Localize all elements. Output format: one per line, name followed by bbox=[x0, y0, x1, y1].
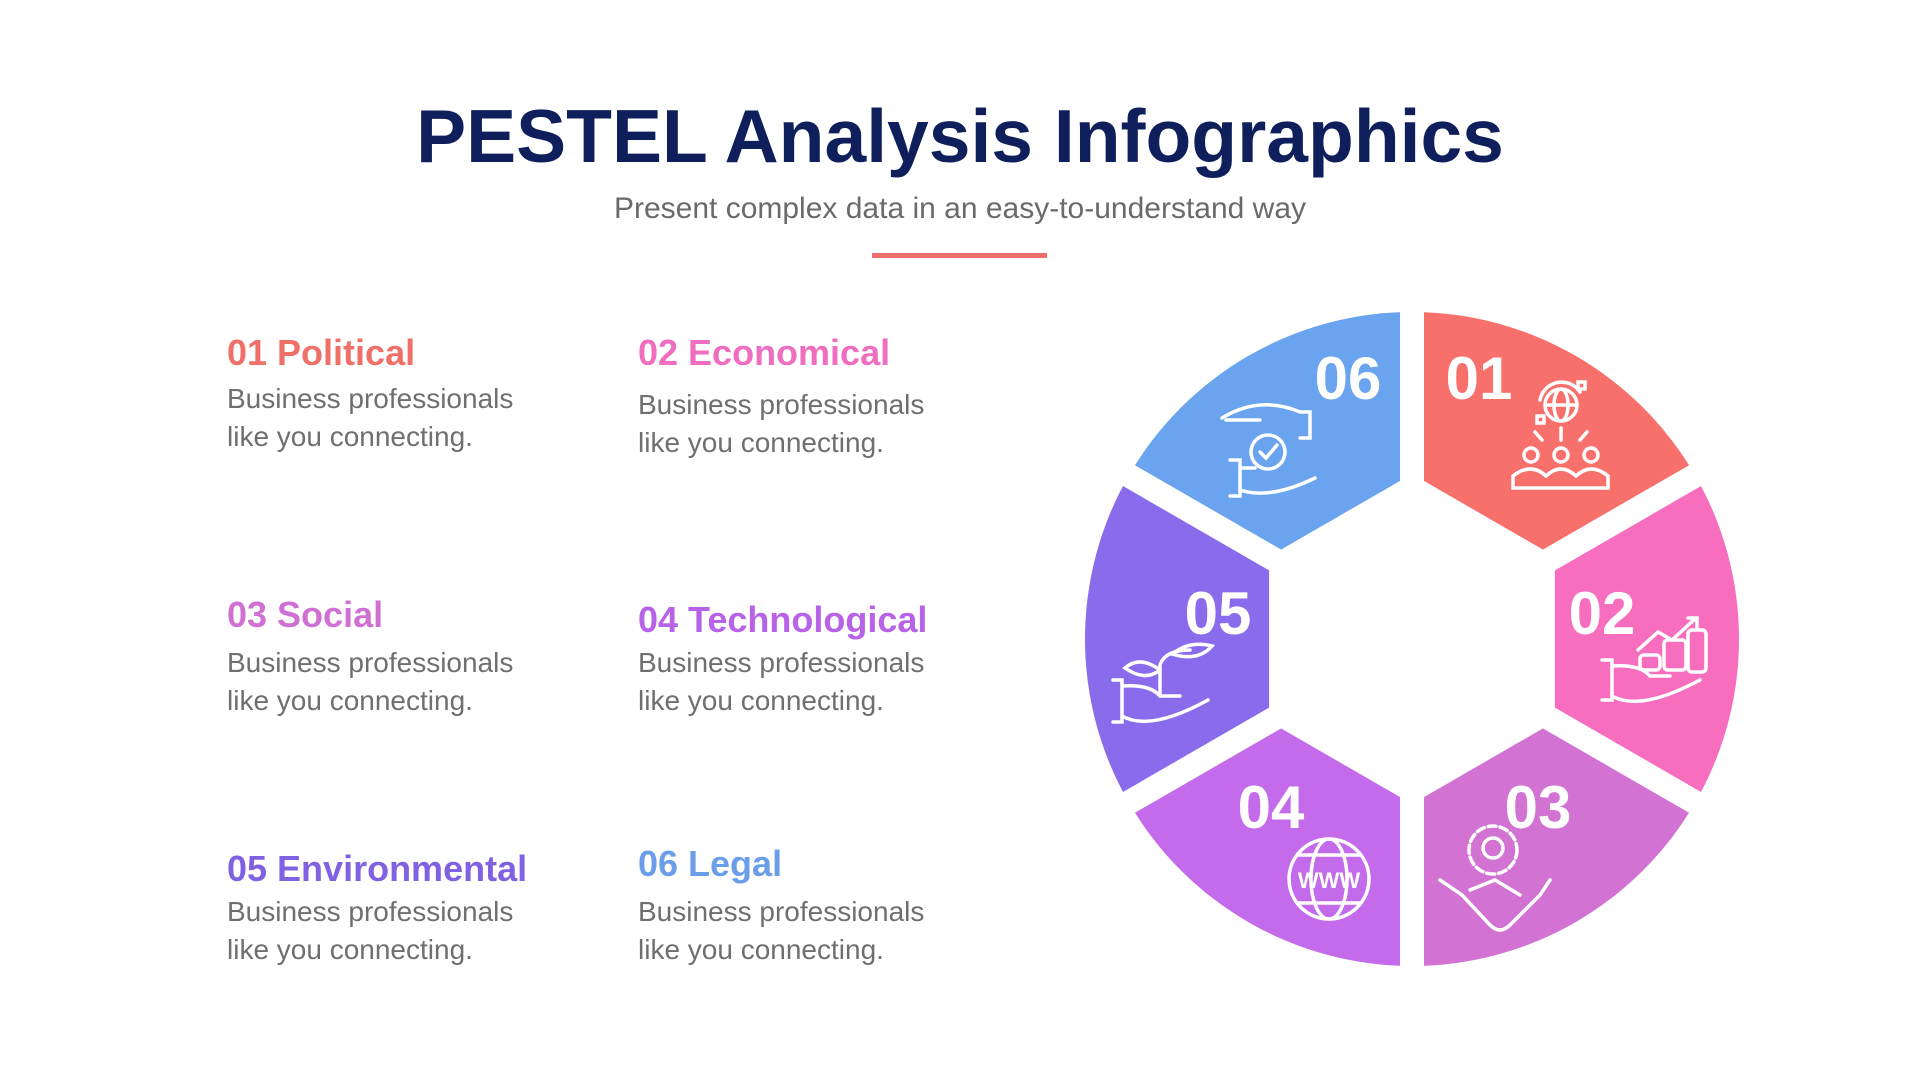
subtitle: Present complex data in an easy-to-understand way bbox=[614, 192, 1306, 225]
numbers: 06 bbox=[1315, 345, 1381, 412]
numbers: 04 bbox=[1238, 774, 1305, 841]
text block: 02 Economical bbox=[638, 332, 924, 458]
text block: 03 Social: 03 Social bbox=[227, 594, 383, 635]
icon: gear with handshake bbox=[1440, 826, 1550, 930]
text block: 03 Social: like you connecting. bbox=[227, 685, 473, 716]
numbers: 05 bbox=[1185, 580, 1251, 647]
segment 01 bbox=[1412, 312, 1695, 639]
text block: 04 Technological: like you connecting. bbox=[638, 685, 884, 716]
icon: www globe bbox=[1289, 839, 1369, 919]
text block: 06 Legal: 06 Legal bbox=[638, 843, 782, 884]
text block: 05 Environmental: like you connecting. bbox=[227, 934, 473, 965]
text block: 03 Social bbox=[227, 594, 513, 716]
text block: 04 Technological: 04 Technological bbox=[638, 599, 927, 640]
icon: www globe: WWW bbox=[1298, 868, 1360, 893]
text block: 01 Political: 01 Political bbox=[227, 332, 415, 373]
text block: 05 Environmental: Business professionals bbox=[227, 896, 513, 927]
numbers: 01 bbox=[1446, 345, 1512, 412]
accent line bbox=[872, 253, 1047, 258]
text block: 05 Environmental bbox=[227, 848, 527, 965]
text block: 04 Technological bbox=[638, 599, 927, 716]
icon: hand with coins bbox=[1602, 618, 1706, 701]
numbers: 03 bbox=[1505, 774, 1571, 841]
text block: 05 Environmental: 05 Environmental bbox=[227, 848, 527, 889]
text block: 01 Political bbox=[227, 332, 513, 452]
icon: hands protecting check bbox=[1222, 405, 1315, 496]
segment 05 bbox=[1085, 476, 1412, 802]
text block: 02 Economical: 02 Economical bbox=[638, 332, 890, 373]
numbers bbox=[1185, 345, 1635, 841]
segment 02 bbox=[1412, 476, 1739, 802]
text block: 01 Political: Business professionals bbox=[227, 383, 513, 414]
segment 03 bbox=[1412, 639, 1695, 966]
text block: 03 Social: Business professionals bbox=[227, 647, 513, 678]
text block: 02 Economical: like you connecting. bbox=[638, 427, 884, 458]
text block: 01 Political: like you connecting. bbox=[227, 421, 473, 452]
icon: globe with people bbox=[1513, 382, 1608, 488]
text block: 06 Legal: Business professionals bbox=[638, 896, 924, 927]
segment 04 bbox=[1129, 639, 1412, 966]
text block: 06 Legal: like you connecting. bbox=[638, 934, 884, 965]
numbers: 02 bbox=[1569, 580, 1635, 647]
title: PESTEL Analysis Infographics bbox=[416, 94, 1504, 178]
text block: 04 Technological: Business professionals bbox=[638, 647, 924, 678]
text block: 02 Economical: Business professionals bbox=[638, 389, 924, 420]
icon: hand with plant bbox=[1113, 644, 1212, 722]
text block: 06 Legal bbox=[638, 843, 924, 965]
segment 06 bbox=[1129, 312, 1412, 639]
